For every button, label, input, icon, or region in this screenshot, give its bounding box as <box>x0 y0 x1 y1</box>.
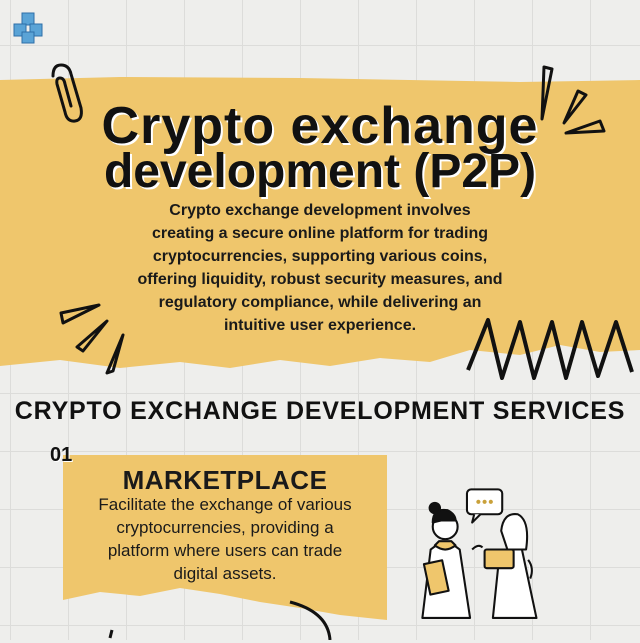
title: Crypto exchange <box>102 97 538 155</box>
text: marketplace: platform where users can trade <box>108 541 342 560</box>
logo icon: cubes <box>14 12 42 44</box>
decoration: zigzag <box>466 318 634 380</box>
section heading: CRYPTO EXCHANGE DEVELOPMENT SERVICES <box>15 397 625 425</box>
intro text: offering liquidity, robust security measures, and <box>137 271 503 288</box>
title <box>102 97 538 199</box>
intro text: creating a secure online platform for trading <box>152 225 488 242</box>
text: marketplace: cryptocurrencies, providing a <box>116 518 334 537</box>
text: marketplace <box>98 495 352 583</box>
decoration: strokes top right <box>540 66 606 134</box>
panel: marketplace <box>98 465 352 583</box>
intro text: cryptocurrencies, supporting various coins, <box>153 248 487 265</box>
heading: marketplace: MARKETPLACE <box>123 465 327 495</box>
illustration: two people talking <box>421 488 538 619</box>
decoration: curve <box>108 600 332 640</box>
intro text: intuitive user experience. <box>224 317 416 334</box>
icon: paperclip <box>52 64 83 123</box>
number 01: 01 <box>50 444 72 466</box>
intro text: Crypto exchange development involves <box>169 202 471 219</box>
title: development (P2P) <box>104 145 536 198</box>
decoration: strokes bottom left <box>60 304 124 374</box>
intro text <box>137 202 503 334</box>
text: marketplace: Facilitate the exchange of various <box>98 495 352 514</box>
intro text: regulatory compliance, while delivering an <box>159 294 481 311</box>
text: marketplace: digital assets. <box>174 564 276 583</box>
service box <box>63 455 387 620</box>
